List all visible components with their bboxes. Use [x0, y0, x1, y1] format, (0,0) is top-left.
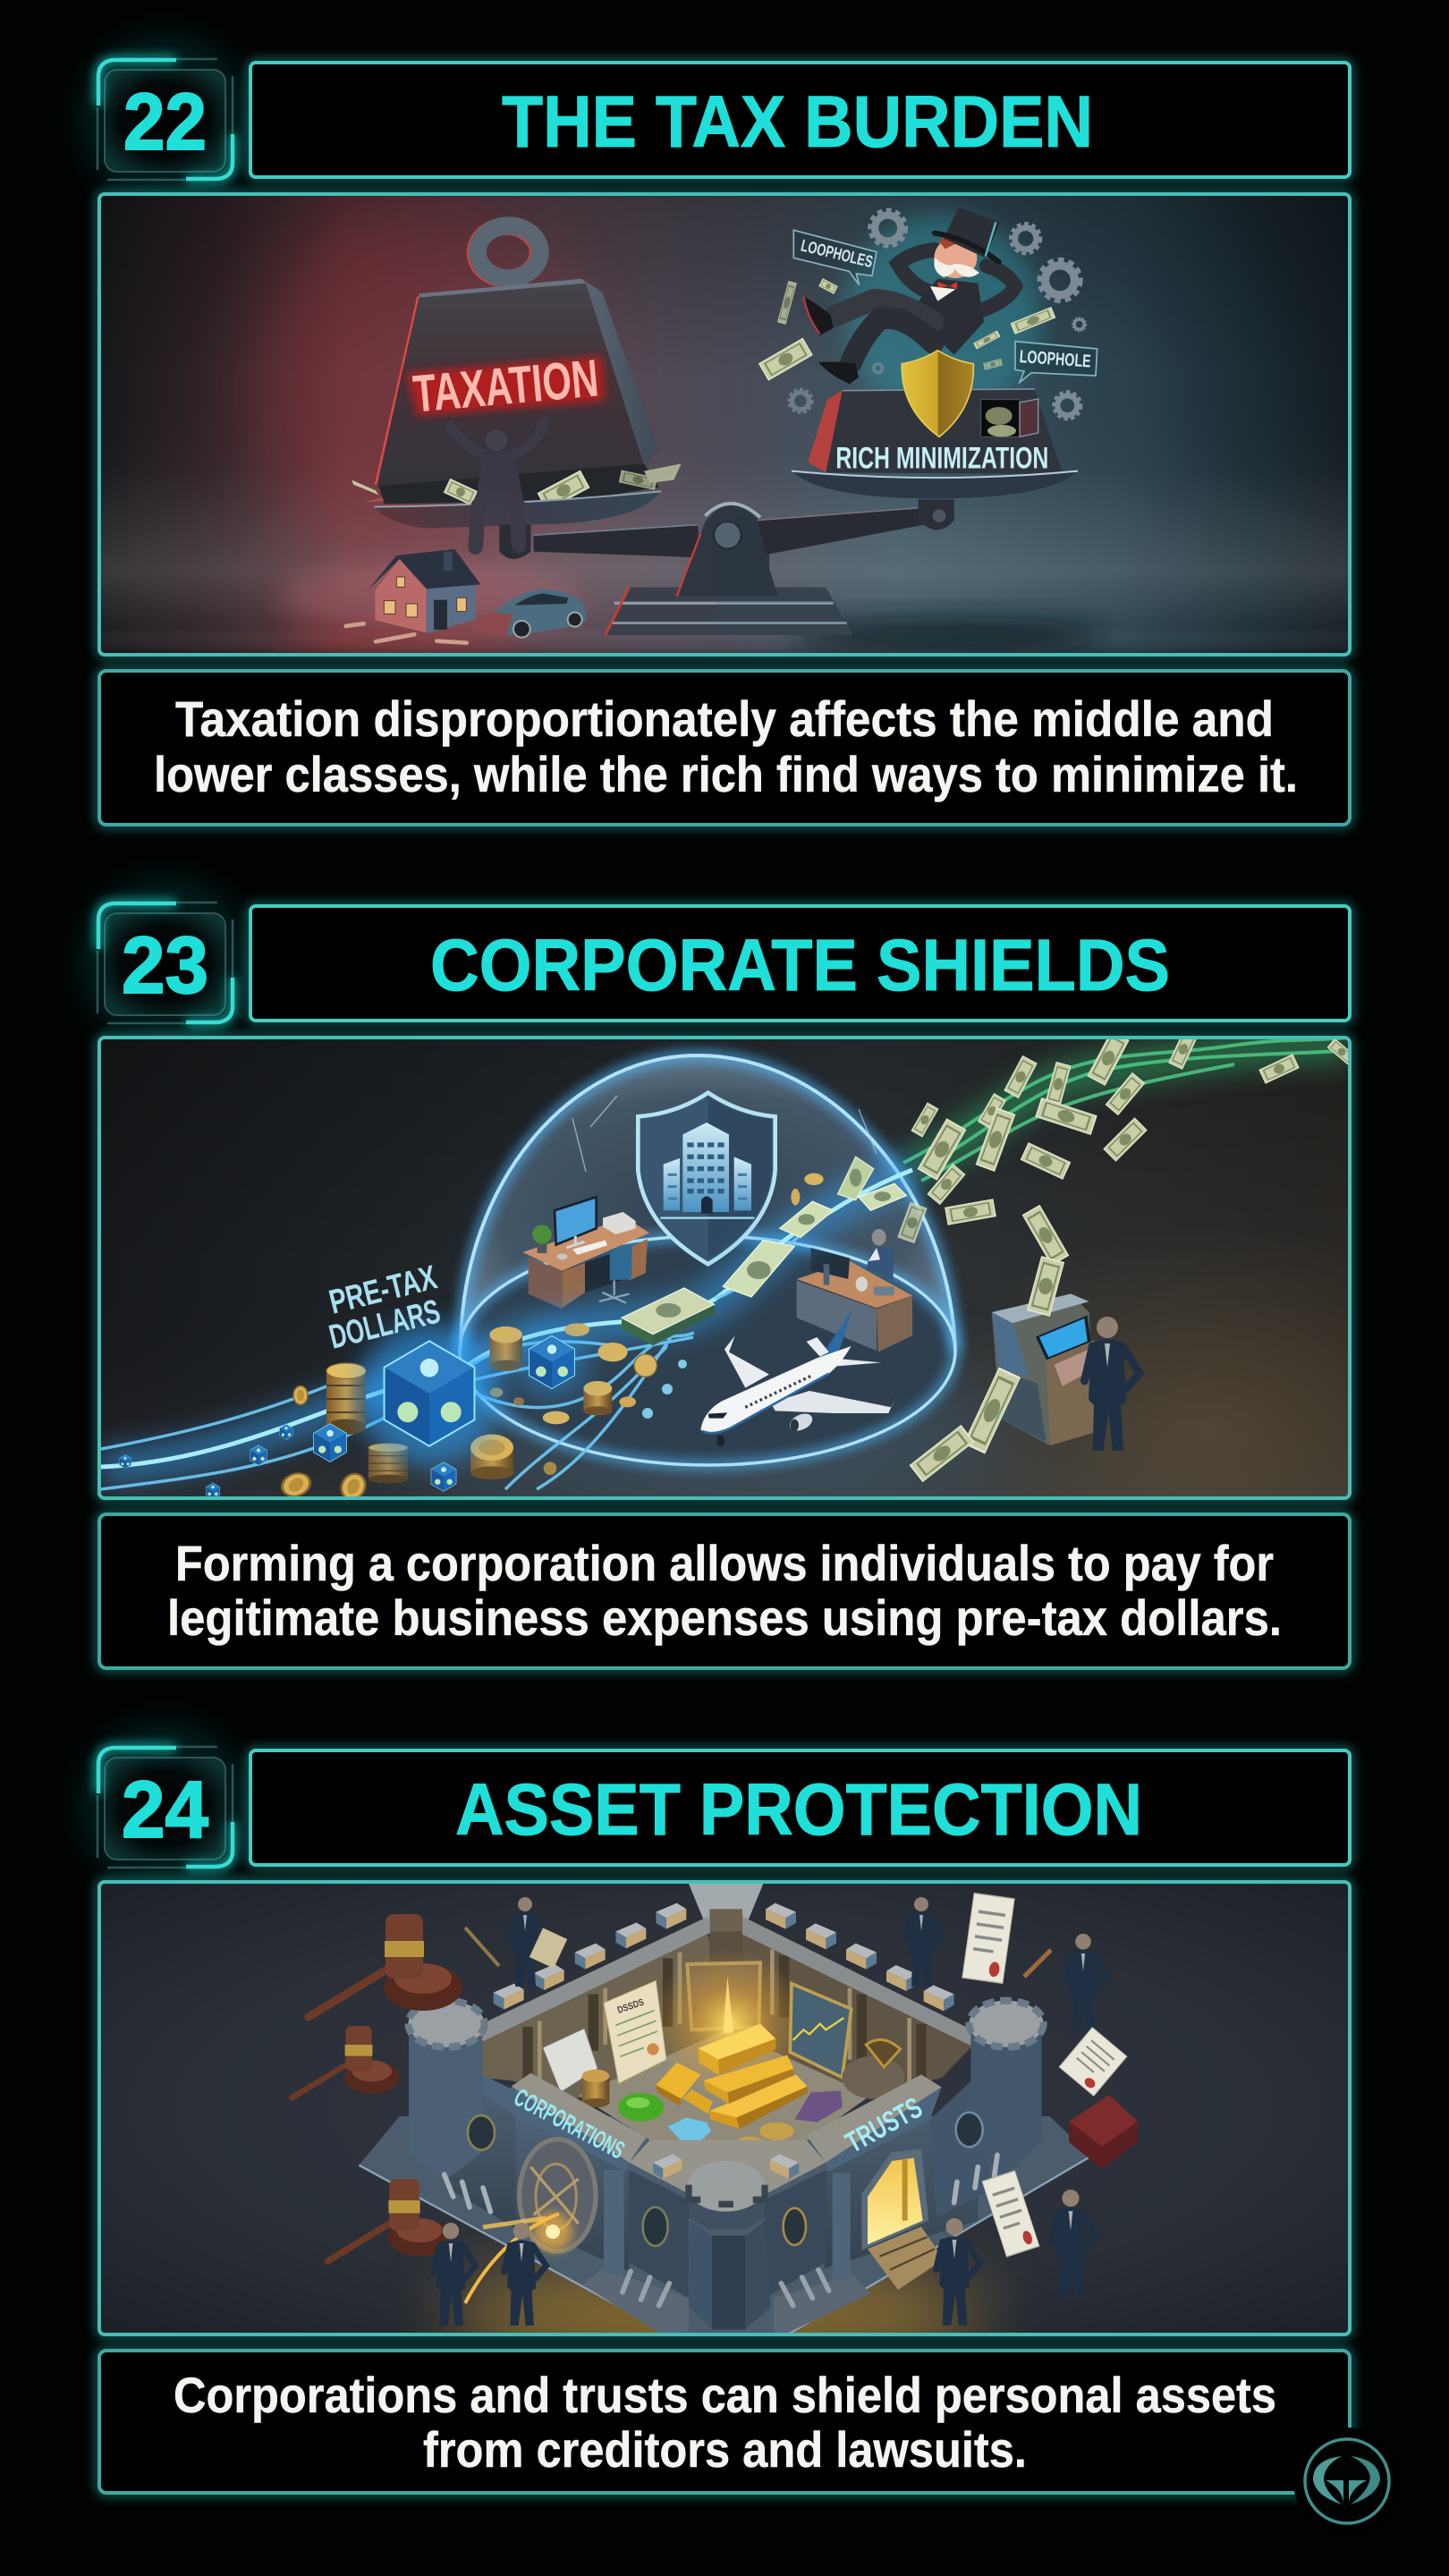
label: trusts: TRUSTS [840, 2090, 928, 2159]
title: the tax burden [250, 63, 1350, 177]
front center bastion [583, 2140, 870, 2334]
number badge 22: 22 [123, 78, 207, 167]
outer platform [359, 2116, 1091, 2334]
house [346, 549, 480, 643]
rich minimization weight and right side of the scale [714, 208, 1097, 635]
flat bills on the stream [622, 1157, 906, 1345]
callout: loopholes: LOOPHOLES [799, 235, 875, 271]
green money trail [903, 1038, 1349, 1181]
panel: fortress illustration [99, 1882, 1350, 2379]
glowing gate [861, 2149, 944, 2290]
text box: tax caption: lower classes, while the rich find ways to minimize it. [154, 746, 1298, 802]
label: pre-tax dollars: PRE-TAX [326, 1258, 441, 1322]
right office desk with worker [797, 1229, 912, 1352]
title: asset protection: ASSET PROTECTION [455, 1769, 1142, 1851]
left front wall [447, 2069, 647, 2271]
merlons on rear walls [494, 1903, 954, 2011]
dollar bills [898, 1030, 1356, 1481]
beam hanger [499, 525, 530, 559]
paper stack and coins [543, 2029, 597, 2092]
number badge 23: 23 [122, 921, 208, 1011]
label: corporations: CORPORATIONS [510, 2083, 630, 2165]
text box: tax caption [99, 671, 1350, 825]
right beam [758, 507, 924, 555]
fortress [359, 1884, 1091, 2334]
label: pre-tax dollars [326, 1258, 444, 1357]
section 22: the tax burden [80, 33, 1350, 825]
number badge 22 [80, 33, 251, 205]
scale pan [374, 491, 661, 529]
wealthy man reclining [803, 208, 1015, 384]
deed document: DSSDS [616, 1997, 646, 2016]
rear turret [689, 1884, 763, 1939]
panel: scale illustration [99, 194, 1350, 657]
stone ledges on rear walls [445, 1917, 710, 2060]
vault door [520, 2140, 596, 2251]
deed document [604, 1980, 666, 2083]
number badge 24: 24 [122, 1766, 208, 1855]
panel: corporate dome illustration [99, 1030, 1449, 1637]
flying dollar bills [759, 278, 1055, 380]
security dome [460, 1055, 955, 1465]
right front wall [807, 2074, 978, 2268]
gavels [292, 1914, 462, 2261]
coins [277, 1174, 824, 1502]
fulcrum and base [606, 504, 769, 635]
person at the machine [1084, 1317, 1140, 1451]
crushed money under the weight [352, 463, 682, 504]
icon: circular logo [1293, 2428, 1401, 2535]
callout: loophole [1015, 342, 1097, 382]
atm machine [992, 1294, 1096, 1445]
label: taxation: TAXATION [411, 349, 601, 424]
gears [789, 210, 1086, 419]
airplane [700, 1309, 896, 1446]
glowing data cubes [120, 1322, 588, 1499]
small figure under the weight [450, 422, 544, 547]
gold bars [656, 2024, 808, 2129]
gold shield [902, 351, 973, 436]
lawyers and legal documents [433, 1894, 1138, 2326]
dome interior: office, shield, airplane [522, 1093, 912, 1446]
number badge 23 [80, 877, 251, 1048]
text box: assets caption: from creditors and lawsuits. [423, 2421, 1027, 2478]
title: corporate shields [250, 906, 1350, 1021]
text box: assets caption: Corporations and trusts can shield personal assets [174, 2367, 1276, 2423]
rich minimization weight [808, 389, 1063, 475]
label: pre-tax dollars: DOLLARS [326, 1292, 444, 1357]
left office desk [522, 1197, 649, 1309]
right-side wall extension, corner towers and spikes [408, 2001, 1044, 2217]
title: corporate shields: CORPORATE SHIELDS [430, 925, 1170, 1006]
vault sparks [465, 2212, 572, 2303]
text box: corporation caption [99, 1514, 1350, 1668]
picture frame [687, 1962, 760, 2029]
gold glow [650, 1949, 811, 2098]
text box: corporation caption: legitimate business expenses using pre-tax dollars. [167, 1589, 1282, 1646]
text box: tax caption: Taxation disproportionately affects the middle and [175, 691, 1274, 747]
title: the tax burden: THE TAX BURDEN [502, 81, 1093, 163]
car [470, 589, 587, 638]
callout: loophole: LOOPHOLE [1019, 347, 1091, 372]
number badge 24 [80, 1721, 251, 1893]
section 24: asset protection [80, 1721, 1350, 2493]
right scale pan [792, 471, 1078, 498]
label: rich minimization: RICH MINIMIZATION [835, 441, 1048, 475]
blue money stream [101, 1170, 912, 1489]
inner walls and floor [445, 1935, 726, 2098]
section 23: corporate shields [80, 877, 1449, 1668]
heavy taxation weight and left side of the scale [346, 225, 769, 643]
text box: assets caption [99, 2351, 1350, 2493]
text box: corporation caption: Forming a corporation allows individuals to pay for [175, 1535, 1274, 1591]
gems, coins and bag [618, 2039, 905, 2159]
title: asset protection [250, 1750, 1350, 1865]
chart frame [790, 1984, 852, 2078]
callout: loopholes [793, 230, 877, 285]
corporate shield with building [638, 1093, 775, 1264]
